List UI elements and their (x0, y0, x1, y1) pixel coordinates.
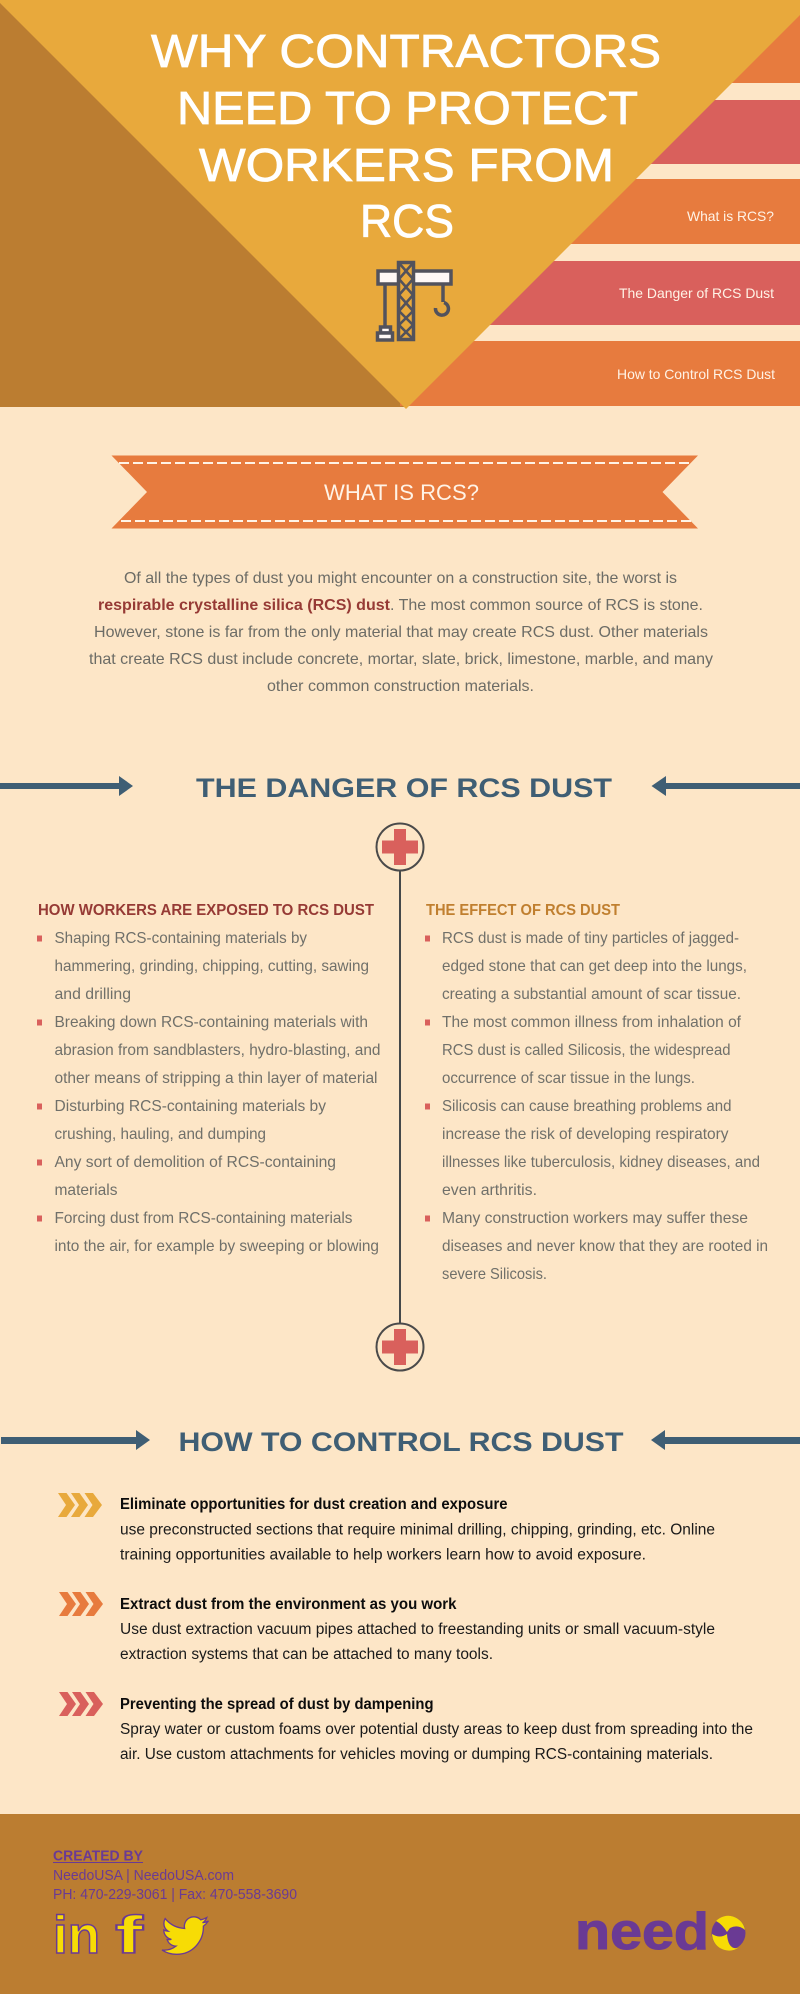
effect list text: RCS dust is made of tiny particles of jagged- (442, 930, 739, 947)
exposure list text: Any sort of demolition of RCS-containing (54, 1154, 336, 1171)
intro paragraph: Of all the types of dust you might encounter on a construction site, the worst is (124, 570, 677, 587)
panel: what is RCS (89, 456, 713, 695)
icon: twitter bird (162, 1917, 208, 1954)
icon: chevrons orange (59, 1592, 103, 1616)
exposure list text: crushing, hauling, and dumping (54, 1126, 266, 1143)
item 3 text: Spray water or custom foams over potential dusty areas to keep dust from spreading into the (120, 1721, 753, 1738)
exposure list text: materials (54, 1182, 118, 1199)
title: WHY CONTRACTORS (151, 25, 661, 77)
item 2 text: extraction systems that can be attached to many tools. (120, 1646, 493, 1663)
exposure list text: into the air, for example by sweeping or blowing (54, 1238, 379, 1255)
column: how workers are exposed (37, 902, 380, 1255)
header brown background (0, 0, 406, 407)
ribbon banner: WHAT IS RCS? (324, 480, 479, 505)
icon: chevrons gold (58, 1493, 102, 1517)
item 2 text: Extract dust from the environment as you work (120, 1596, 457, 1613)
arrow: right heading arrow (652, 776, 800, 796)
navigation labels: The Danger of RCS Dust (619, 285, 774, 301)
logo: needo: need (575, 1903, 709, 1961)
panel: header (0, 0, 800, 409)
intro paragraph (89, 570, 713, 695)
item 1 text: training opportunities available to help workers learn how to avoid exposure. (120, 1546, 646, 1564)
icon: crane (378, 262, 451, 340)
title: WORKERS FROM (199, 139, 614, 191)
item 1 text: use preconstructed sections that require minimal drilling, chipping, grinding, etc. Online (120, 1522, 715, 1538)
icon: linkedin: in (53, 1906, 100, 1965)
exposure list text: Forcing dust from RCS-containing materials (54, 1210, 352, 1227)
exposure list text (54, 930, 380, 1255)
intro paragraph: . The most common source of RCS is stone. (390, 597, 703, 614)
control item 3 (59, 1692, 753, 1763)
effect list text: severe Silicosis. (442, 1266, 547, 1283)
credits: CREATED BY (53, 1848, 143, 1864)
arrow: right heading arrow (651, 1430, 800, 1450)
effect list text (442, 930, 768, 1283)
navigation labels: How to Control RCS Dust (617, 366, 775, 382)
exposure list text: Breaking down RCS-containing materials with (54, 1014, 368, 1031)
navigation labels: What is RCS? (687, 208, 774, 224)
effect list text: Many construction workers may suffer these (442, 1210, 748, 1227)
effect list text: The most common illness from inhalation of (442, 1014, 742, 1031)
intro paragraph: respirable crystalline silica (RCS) dust (98, 597, 391, 614)
subheading: how workers are exposed: HOW WORKERS ARE EXPOSED TO RCS DUST (38, 902, 374, 919)
item 2 text (120, 1596, 715, 1663)
exposure list text: Shaping RCS-containing materials by (54, 930, 307, 947)
title (151, 25, 661, 247)
item 1 text: Eliminate opportunities for dust creation and exposure (120, 1496, 508, 1513)
item 2 text: Use dust extraction vacuum pipes attached to freestanding units or small vacuum-style (120, 1621, 715, 1638)
bullets (37, 936, 42, 1222)
title: NEED TO PROTECT (177, 82, 638, 134)
exposure list text: other means of stripping a thin layer of material (54, 1070, 378, 1087)
effect list text: even arthritis. (442, 1182, 537, 1199)
item 3 text (120, 1696, 753, 1763)
panel: how to control RCS dust (1, 1427, 800, 1763)
exposure list text: abrasion from sandblasters, hydro-blasting, and (54, 1042, 380, 1059)
intro paragraph: that create RCS dust include concrete, mortar, slate, brick, limestone, marble, and many (89, 651, 713, 668)
exposure list text: Disturbing RCS-containing materials by (54, 1098, 326, 1115)
heading: how to control RCS dust: HOW TO CONTROL RCS DUST (178, 1427, 624, 1457)
column: the effect of RCS dust (425, 902, 768, 1283)
ribbon banner (112, 456, 698, 528)
credits: NeedoUSA | NeedoUSA.com (53, 1868, 234, 1884)
item 3 text: Preventing the spread of dust by dampening (120, 1696, 434, 1713)
gold triangle (0, 0, 800, 409)
effect list text: Silicosis can cause breathing problems and (442, 1098, 732, 1115)
exposure list text: and drilling (54, 986, 131, 1003)
panel: footer (0, 1814, 800, 1994)
intro paragraph: However, stone is far from the only material that may create RCS dust. Other materials (94, 624, 708, 641)
control item 2 (59, 1592, 715, 1663)
title: RCS (360, 195, 454, 247)
panel: the danger of RCS dust (0, 773, 800, 1370)
arrow: left heading arrow (1, 1430, 150, 1450)
timeline divider with medical icons (376, 824, 424, 1370)
effect bullets (425, 936, 430, 1222)
arrow: left heading arrow (0, 776, 133, 796)
icon: chevrons red (59, 1692, 103, 1716)
effect list text: occurrence of scar tissue in the lungs. (442, 1070, 695, 1087)
navigation labels (617, 208, 775, 382)
exposure list text: hammering, grinding, chipping, cutting, sawing (54, 958, 369, 975)
effect list text: illnesses like tuberculosis, kidney diseases, and (442, 1154, 760, 1171)
heading: the danger of RCS dust: THE DANGER OF RCS DUST (196, 773, 613, 803)
credits: PH: 470-229-3061 | Fax: 470-558-3690 (53, 1887, 297, 1903)
icon: facebook: f (115, 1906, 144, 1965)
control item 1 (58, 1493, 715, 1564)
navigation bands (400, 0, 800, 406)
item 1 text (120, 1496, 715, 1564)
subheading: the effect of RCS dust: THE EFFECT OF RCS DUST (426, 902, 620, 919)
footer background (0, 1814, 800, 1994)
credits (53, 1848, 297, 1903)
effect list text: creating a substantial amount of scar tissue. (442, 986, 741, 1003)
effect list text: RCS dust is called Silicosis, the widespread (442, 1042, 730, 1059)
effect list text: edged stone that can get deep into the lungs, (442, 958, 747, 975)
effect list text: increase the risk of developing respiratory (442, 1126, 728, 1143)
effect list text: diseases and never know that they are rooted in (442, 1238, 768, 1255)
intro paragraph: other common construction materials. (267, 678, 534, 695)
item 3 text: air. Use custom attachments for vehicles moving or dumping RCS-containing materials. (120, 1746, 713, 1763)
